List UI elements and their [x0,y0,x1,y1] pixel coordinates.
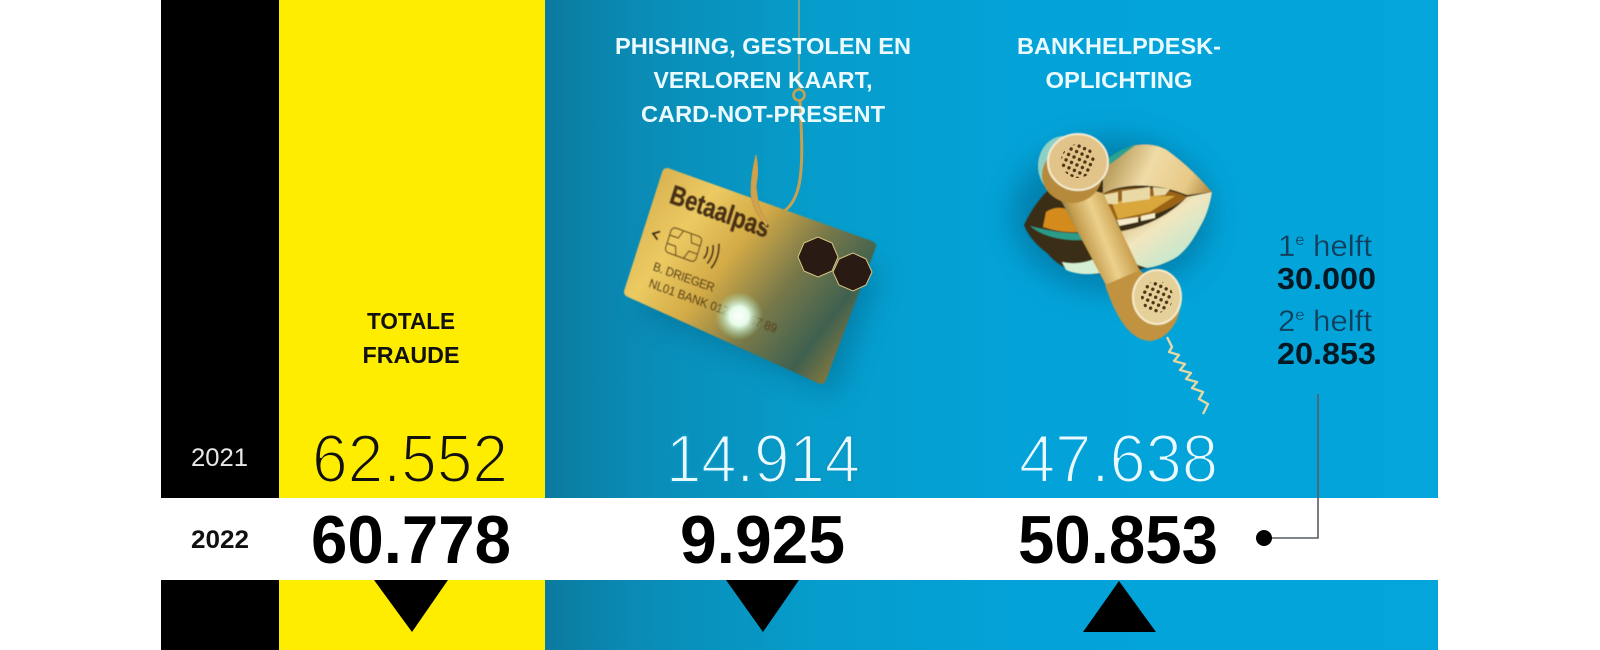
upper teeth [1103,187,1170,204]
arrow: total down [374,580,448,632]
arrow: helpdesk up [1083,581,1156,632]
white 2022 band [161,498,1438,580]
heading: total fraud: FRAUDE [362,342,460,368]
upper lip [1103,144,1212,195]
value: total 2021: 62.552 [312,421,508,497]
label: second half: 2 [1278,305,1295,338]
icon: hook barb [751,155,768,226]
lips silhouette [1024,144,1212,274]
mouth interior [1103,188,1187,222]
heading: phishing: PHISHING, GESTOLEN EN [615,33,911,59]
value: phishing 2021: 14.914 [666,421,860,497]
year 2021: 2021 [191,444,248,472]
cardholder name: B. DRIEGER [651,259,717,295]
panel: year column [161,0,279,650]
value: first half: 30.000 [1277,261,1376,296]
card chip [649,221,721,269]
label: first half: e [1295,232,1305,249]
icon: golden lips with telephone [1012,134,1212,414]
lower teeth [1117,213,1155,226]
card number: NL01 BANK 0123 4567 89 [647,276,779,336]
arrow: phishing down [726,580,799,632]
label: first half: helft [1305,230,1373,263]
heading: bank helpdesk fraud [1017,33,1221,93]
value: second half: 20.853 [1277,336,1376,371]
icon: card logo circles [798,237,872,291]
value: phishing 2022: 9.925 [680,502,845,578]
year 2022: 2022 [191,526,249,554]
heading: total fraud [362,308,460,368]
value: helpdesk 2021: 47.638 [1019,421,1218,497]
label: first half: 1 [1278,230,1295,263]
label: second half: e [1295,307,1305,324]
heading: phishing [615,33,911,127]
value: total 2022: 60.778 [311,502,511,578]
icon: fishing hook line and shank [780,0,804,214]
telephone cord [1167,337,1208,414]
panel: total fraud [279,0,545,650]
telephone speaker holes [1061,144,1173,313]
heading: phishing: VERLOREN KAART, [654,67,872,93]
label: second half [1278,305,1373,338]
label: first half [1278,230,1373,263]
callout connector [1256,394,1318,546]
heading: bank helpdesk fraud: OPLICHTING [1046,67,1192,93]
card light flare [715,292,763,340]
value: helpdesk 2022: 50.853 [1018,502,1218,578]
left lip and mouth [1043,208,1080,232]
panel: blue background [545,0,1438,650]
telephone handset [1038,134,1181,341]
heading: total fraud: TOTALE [367,308,455,334]
heading: phishing: CARD-NOT-PRESENT [641,101,885,127]
card brand: Betaalpas [666,179,774,244]
lower lip [1116,192,1212,268]
heading: bank helpdesk fraud: BANKHELPDESK- [1017,33,1221,59]
label: second half: helft [1305,305,1373,338]
icon: gold bank card [629,173,880,395]
